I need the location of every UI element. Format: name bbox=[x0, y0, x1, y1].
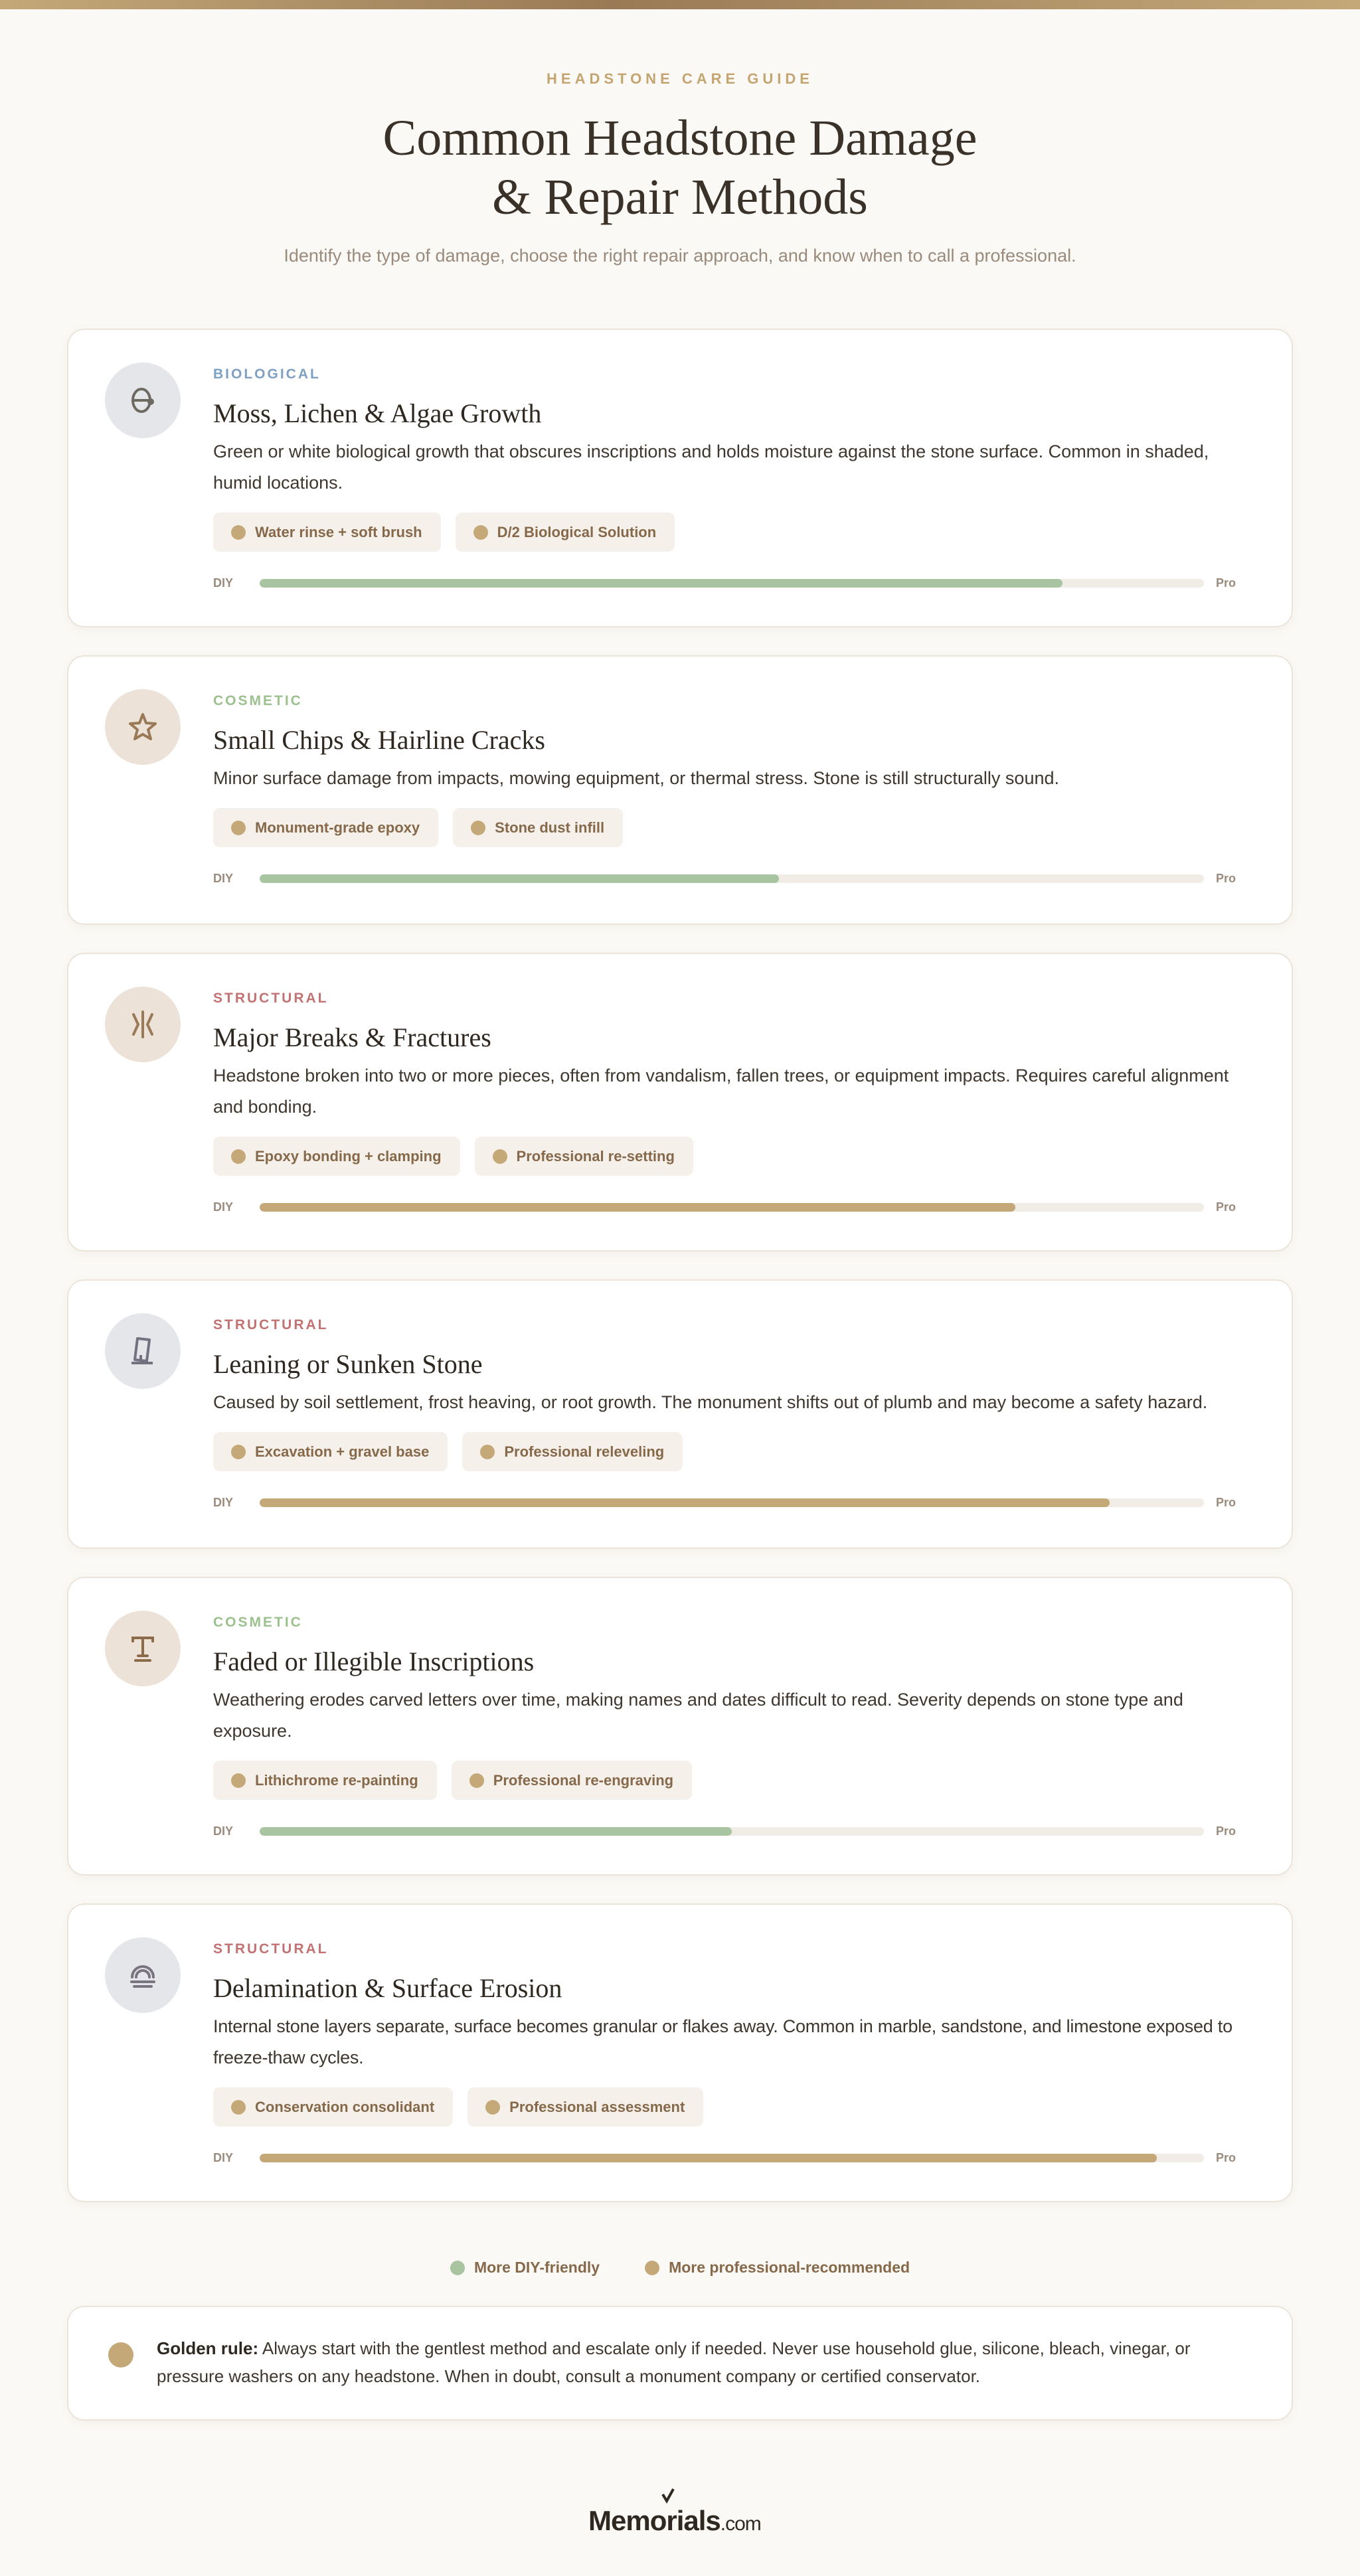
legend: More DIY-friendly bbox=[474, 2259, 600, 2276]
panel: breaks bbox=[67, 953, 1293, 1251]
bar: DIY Pro bbox=[213, 1824, 1236, 1838]
description: Internal stone layers separate, surface becomes granular or flakes away. Common in marble, sandstone, and limestone exposed to bbox=[213, 2016, 1232, 2036]
icon: text bbox=[105, 1611, 181, 1686]
chips bbox=[213, 1432, 683, 1471]
title: & Repair Methods bbox=[492, 169, 868, 225]
heading: Small Chips & Hairline Cracks bbox=[213, 725, 545, 755]
icon: star bbox=[105, 689, 181, 765]
panel: chips: COSMETIC bbox=[213, 693, 303, 708]
chips bbox=[213, 1137, 693, 1176]
logo: Memorials.com bbox=[588, 2505, 761, 2536]
chips: Lithichrome re-painting bbox=[255, 1771, 418, 1789]
chips: Professional assessment bbox=[509, 2098, 685, 2115]
chips bbox=[213, 513, 675, 552]
legend: More professional-recommended bbox=[669, 2259, 910, 2276]
chips: Excavation + gravel base bbox=[255, 1443, 429, 1459]
panel: inscriptions: COSMETIC bbox=[213, 1615, 303, 1630]
panel: leaning bbox=[67, 1279, 1293, 1549]
heading: Leaning or Sunken Stone bbox=[213, 1349, 482, 1379]
heading: Major Breaks & Fractures bbox=[213, 1022, 491, 1052]
description: Weathering erodes carved letters over time, making names and dates difficult to read. Severity depends on stone type and exposure. bbox=[213, 1690, 1183, 1741]
title bbox=[383, 110, 977, 225]
legend bbox=[450, 2259, 910, 2276]
panel: moss bbox=[67, 329, 1293, 627]
chips: Epoxy bonding + clamping bbox=[255, 1147, 442, 1165]
icon: leaning stone bbox=[105, 1313, 181, 1389]
chips: Professional releveling bbox=[504, 1443, 664, 1459]
description: Caused by soil settlement, frost heaving, or root growth. The monument shifts out of plumb and may become a safety hazard. bbox=[213, 1392, 1207, 1412]
chips: Stone dust infill bbox=[495, 819, 604, 835]
chips bbox=[213, 808, 623, 847]
panel: inscriptions bbox=[67, 1577, 1293, 1876]
bar: DIY Pro bbox=[213, 1200, 1236, 1214]
bar: DIY Pro bbox=[213, 871, 1236, 884]
description: freeze-thaw cycles. bbox=[213, 2048, 363, 2067]
panel: chips bbox=[67, 655, 1293, 925]
description: Green or white biological growth that obscures inscriptions and holds moisture against the stone surface. Common in shaded, humid locations. bbox=[213, 442, 1209, 493]
heading: Delamination & Surface Erosion bbox=[213, 1973, 562, 2003]
callout: golden rule: Golden rule: Always start with the gentlest method and escalate only if needed. Never use household glue, silicone, bleach, vinegar, or pressure washers on any headstone. When in doubt, consult a monument company or certified conservator. bbox=[157, 2338, 1191, 2386]
panel: delamination: STRUCTURAL bbox=[213, 1941, 328, 1957]
chips: Monument-grade epoxy bbox=[255, 819, 420, 835]
icon: moss bbox=[105, 362, 181, 438]
heading: Moss, Lichen & Algae Growth bbox=[213, 398, 541, 428]
heading: Faded or Illegible Inscriptions bbox=[213, 1647, 534, 1676]
chips bbox=[213, 2087, 703, 2127]
chips: Professional re-setting bbox=[517, 1147, 675, 1165]
callout: golden rule bbox=[67, 2306, 1293, 2421]
chips: D/2 Biological Solution bbox=[497, 523, 656, 540]
description: Minor surface damage from impacts, mowing equipment, or thermal stress. Stone is still structurally sound. bbox=[213, 768, 1059, 788]
description bbox=[213, 2016, 1232, 2067]
icon: layers bbox=[105, 1937, 181, 2013]
eyebrow: HEADSTONE CARE GUIDE bbox=[547, 70, 813, 87]
panel: delamination bbox=[67, 1903, 1293, 2202]
logo bbox=[588, 2488, 761, 2536]
bar: DIY Pro bbox=[213, 1495, 1236, 1508]
chips bbox=[213, 1761, 692, 1800]
panel: moss: BIOLOGICAL bbox=[213, 366, 321, 382]
subtitle: Identify the type of damage, choose the right repair approach, and know when to call a professional. bbox=[284, 246, 1076, 266]
panel: breaks: STRUCTURAL bbox=[213, 991, 328, 1006]
panel: leaning: STRUCTURAL bbox=[213, 1317, 328, 1332]
bar: DIY Pro bbox=[213, 2151, 1236, 2164]
icon: break bbox=[105, 987, 181, 1062]
chips: Conservation consolidant bbox=[255, 2098, 434, 2115]
chips: Water rinse + soft brush bbox=[255, 523, 422, 540]
title: Common Headstone Damage bbox=[383, 110, 977, 166]
bar: DIY-Pro: DIY Pro bbox=[213, 576, 1236, 590]
chips: Professional re-engraving bbox=[493, 1771, 673, 1789]
description: Headstone broken into two or more pieces, often from vandalism, fallen trees, or equipment impacts. Requires careful alignment and bonding. bbox=[213, 1066, 1229, 1117]
